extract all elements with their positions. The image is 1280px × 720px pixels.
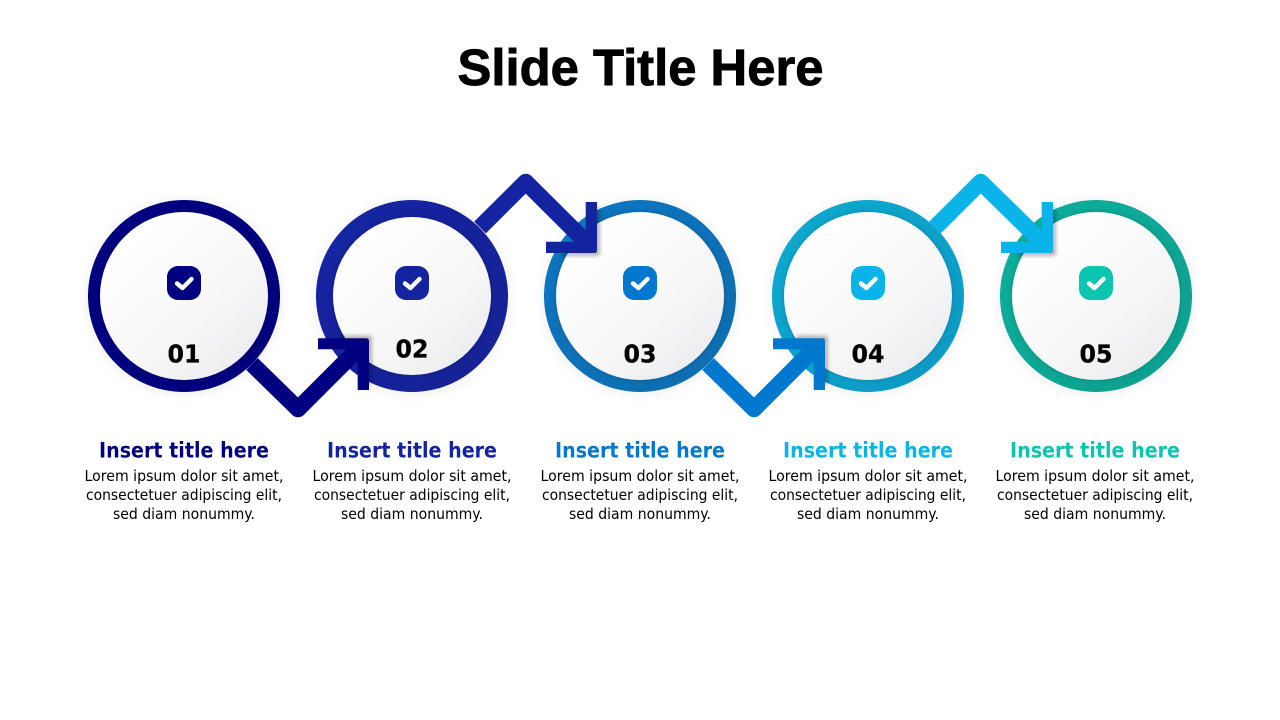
text block 04 [768,438,968,523]
text block 04: sed diam nonummy. [797,505,939,523]
text block 04: Lorem ipsum dolor sit amet, [768,467,968,485]
circle 02 [316,200,508,392]
text block 05: consectetuer adipiscing elit, [997,486,1193,504]
number 02: 02 [396,334,428,364]
circle 05 [1000,200,1192,392]
circle 04 [772,200,964,392]
text block 05: sed diam nonummy. [1024,505,1166,523]
text block 02: consectetuer adipiscing elit, [314,486,510,504]
text block 02: Insert title here [327,438,497,464]
icon: check 05 [1079,266,1113,300]
number 01: 01 [168,340,200,368]
title: Slide Title Here [458,39,824,96]
arrow: 01 to 02 [252,338,370,409]
text block 02 [312,438,512,523]
text block 01 [84,438,284,523]
text block 02: Lorem ipsum dolor sit amet, [312,467,512,485]
text block 01: Insert title here [99,438,269,464]
text block 03: consectetuer adipiscing elit, [542,486,738,504]
text block 03: Insert title here [555,438,725,464]
circle 03 [544,200,736,392]
circle 01 [88,200,280,392]
text block 04: consectetuer adipiscing elit, [770,486,966,504]
icon: check 04 [851,266,885,300]
number 04: 04 [852,340,884,368]
number 03: 03 [624,340,656,368]
text block 03: Lorem ipsum dolor sit amet, [540,467,740,485]
text block 02: sed diam nonummy. [341,505,483,523]
arrow: 02 to 03 [480,182,598,254]
arrow: 03 to 04 [708,338,826,409]
icon: check 03 [623,266,657,300]
text block 01: Lorem ipsum dolor sit amet, [84,467,284,485]
icon: check 01 [167,266,201,300]
text block 05: Lorem ipsum dolor sit amet, [996,467,1194,485]
text block 04: Insert title here [783,438,953,464]
text block 05: Insert title here [1010,438,1180,464]
icon: check 02 [395,266,429,300]
text block 05 [996,438,1194,523]
number 05: 05 [1080,340,1112,368]
arrow: 04 to 05 [935,182,1054,254]
text block 03: sed diam nonummy. [569,505,711,523]
text block 01: consectetuer adipiscing elit, [86,486,282,504]
text block 01: sed diam nonummy. [113,505,255,523]
text block 03 [540,438,740,523]
